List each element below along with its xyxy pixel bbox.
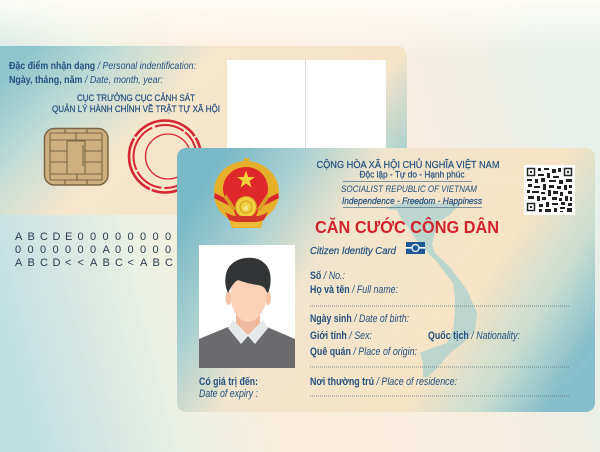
panel: front of card [177,148,600,412]
national title: SOCIALIST REPUBLIC OF VIETNAM [341,184,477,195]
collar [228,320,268,344]
machine readable zone [15,231,184,269]
issuing authority: QUẢN LÝ HÀNH CHÍNH VỀ TRẬT TỰ XÃ HỘI [52,103,220,115]
personal identification labels: Ngày, tháng, năm / Date, month, year: [9,74,163,86]
issuing authority: CỤC TRƯỞNG CỤC CẢNH SÁT [77,92,195,104]
national title: Independence - Freedom - Happiness [342,196,482,207]
field labels: Ngày sinh / Date of birth: [310,313,409,325]
photo and fingerprint boxes [227,60,386,170]
icon: chip symbol [406,242,425,254]
neck and face [236,310,260,336]
hair [225,258,271,293]
field labels: Số / No.: [310,270,345,282]
field labels: Họ và tên / Full name: [310,284,398,296]
personal identification labels [9,60,196,86]
machine readable zone: ABCDE00000000 [15,231,171,243]
icon: chip [44,128,108,185]
emblem ribbon [225,212,268,222]
national emblem [214,158,279,228]
field labels [199,270,520,400]
icon: red stamp [129,120,201,192]
field labels: Giới tính / Sex: [310,330,372,342]
field labels: Quê quán / Place of origin: [310,346,417,358]
machine readable zone: 0000000A00000 [15,244,171,256]
shirt [199,327,295,368]
field labels: Date of expiry : [199,388,258,400]
national title: CỘNG HÒA XÃ HỘI CHỦ NGHĨA VIỆT NAM [316,158,500,171]
card subtitle: Citizen Identity Card [310,245,397,257]
QR code [524,165,575,215]
machine readable zone: ABCD<<ABC<ABC< [15,257,184,269]
emblem star [237,170,255,188]
portrait photo [199,245,295,368]
field labels: Nơi thường trú / Place of residence: [310,376,457,388]
emblem wheat [224,194,269,211]
panel: back of card [0,46,407,215]
national title: Độc lập - Tự do - Hạnh phúc [360,170,465,180]
map of Vietnam [386,200,477,378]
card title: CĂN CƯỚC CÔNG DÂN [315,216,499,237]
field labels: Có giá trị đến: [199,376,258,388]
emblem gear [236,196,256,218]
issuing authority [52,92,220,115]
field labels: Quốc tịch / Nationality: [428,330,520,342]
national title [316,158,500,207]
personal identification labels: Đặc điểm nhận dạng / Personal indentification: [9,60,196,72]
